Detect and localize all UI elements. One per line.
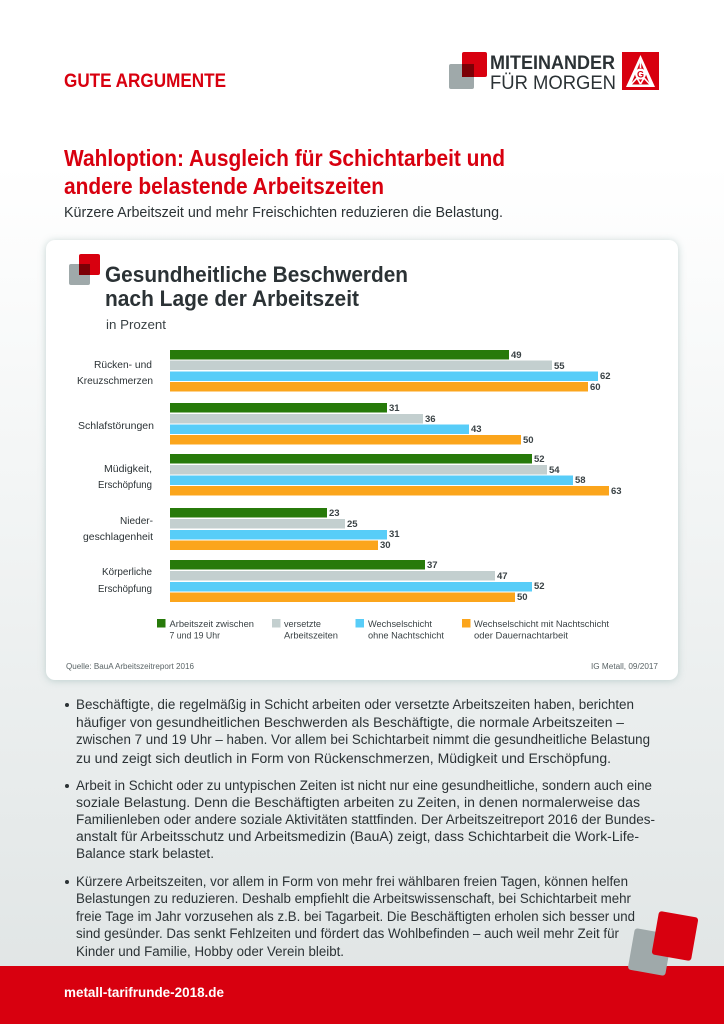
chart unit: in Prozent — [106, 318, 167, 332]
logo: Miteinander für Morgen: G — [637, 70, 644, 80]
text block: bullet 3: Kinder und Familie, Hobby oder Verein bleibt. — [76, 944, 344, 959]
legend: oder Dauernachtarbeit — [474, 630, 568, 642]
group: Müdigkeit, Erschöpfung: 52 — [534, 454, 545, 465]
group: Körperliche Erschöpfung — [98, 560, 545, 603]
group: Schlafstörungen — [78, 403, 534, 446]
icon: tilted squares — [628, 911, 699, 976]
group: Schlafstörungen: 36 — [425, 414, 436, 425]
group: Körperliche Erschöpfung: 47 — [497, 571, 508, 582]
text block: bullet 2: Arbeit in Schicht oder zu untypischen Zeiten ist nicht nur eine gesundheitliche, sondern auch eine — [76, 778, 652, 793]
text block: bullet 3: freie Tage im Jahr vorzusehen als z.B. bei Tagarbeit. Die Beschäftigten erholen sich besser und — [76, 909, 635, 924]
group: Schlafstörungen: 50 — [523, 435, 534, 446]
text block: bullet 1: zu und zeigt sich deutlich in Form von Rückenschmerzen, Müdigkeit und Erschöpfung. — [76, 751, 611, 766]
text block: bullet 1: häufiger von gesundheitlichen Beschwerden als Beschäftigte, die normale Arbeitszeiten – — [76, 715, 624, 730]
group: Körperliche Erschöpfung: Körperliche — [102, 566, 152, 578]
group: Körperliche Erschöpfung: 50 — [517, 592, 528, 603]
group: Niedergeschlagenheit: 30 — [380, 540, 391, 551]
text block: bullet 3: Kürzere Arbeitszeiten, vor allem in Form von mehr frei wählbaren freien Tagen, können helfen — [76, 874, 628, 889]
legend: Arbeitszeit zwischen — [170, 619, 254, 630]
heading — [64, 145, 505, 199]
legend: versetzte — [284, 619, 321, 630]
footer bar: metall-tarifrunde-2018.de — [64, 984, 224, 1000]
group: Niedergeschlagenheit: 31 — [389, 529, 400, 540]
icon: chart squares — [69, 254, 100, 285]
group: Rücken- und Kreuzschmerzen: Kreuzschmerzen — [77, 375, 153, 387]
heading: Wahloption: Ausgleich für Schichtarbeit und — [64, 145, 505, 171]
subheading: Kürzere Arbeitszeit und mehr Freischichten reduzieren die Belastung. — [64, 204, 503, 221]
section label: Gute Argumente: GUTE ARGUMENTE — [64, 71, 226, 92]
chart title: Gesundheitliche Beschwerden — [105, 262, 408, 287]
logo: Miteinander für Morgen: FÜR MORGEN — [490, 73, 616, 94]
group: Rücken- und Kreuzschmerzen — [77, 350, 611, 393]
group: Rücken- und Kreuzschmerzen: 62 — [600, 371, 611, 382]
legend: ohne Nachtschicht — [368, 630, 444, 642]
group: Müdigkeit, Erschöpfung: 63 — [611, 486, 622, 497]
group: Niedergeschlagenheit: 25 — [347, 519, 358, 530]
chart title — [105, 262, 408, 311]
text block: bullet 1 — [65, 697, 650, 766]
legend: Wechselschicht mit Nachtschicht — [474, 619, 609, 630]
group: Körperliche Erschöpfung: 37 — [427, 560, 438, 571]
legend: Wechselschicht — [368, 619, 432, 630]
group: Rücken- und Kreuzschmerzen: 49 — [511, 350, 522, 361]
text block: bullet 2: Familienleben oder andere soziale Aktivitäten stattfinden. Der Arbeitszeitreport 2016 der Bundes- — [76, 812, 655, 827]
group: Rücken- und Kreuzschmerzen: Rücken- und — [94, 359, 152, 371]
text block: bullet 3: Belastungen zu reduzieren. Deshalb empfiehlt die Arbeitswissenschaft, bei Schichtarbeit mehr — [76, 891, 631, 906]
group: Rücken- und Kreuzschmerzen: 60 — [590, 382, 601, 393]
group: Schlafstörungen: 43 — [471, 424, 482, 435]
group: Müdigkeit, Erschöpfung — [98, 454, 622, 497]
group: Schlafstörungen: Schlafstörungen — [78, 420, 154, 432]
chart title: nach Lage der Arbeitszeit — [105, 286, 359, 311]
group: Niedergeschlagenheit: geschlagenheit — [83, 531, 153, 543]
text block: bullet 2: soziale Belastung. Denn die Beschäftigten arbeiten zu Zeiten, in denen normalerweise das — [76, 795, 640, 810]
legend — [157, 619, 609, 642]
legend: 7 und 19 Uhr — [170, 630, 220, 642]
group: Körperliche Erschöpfung: 52 — [534, 581, 545, 592]
group: Schlafstörungen: 31 — [389, 403, 400, 414]
credit note: IG Metall, 09/2017 — [591, 662, 659, 671]
text block: bullet 1: zwischen 7 und 19 Uhr – haben. Vor allem bei Schichtarbeit nimmt die gesundheitliche Belastung — [76, 732, 650, 747]
group: Müdigkeit, Erschöpfung: Müdigkeit, — [104, 463, 152, 475]
logo: Miteinander für Morgen: MITEINANDER — [490, 53, 615, 74]
legend: Arbeitszeiten — [284, 630, 338, 642]
group: Niedergeschlagenheit: Nieder- — [120, 515, 153, 527]
group: Rücken- und Kreuzschmerzen: 55 — [554, 361, 565, 372]
group: Müdigkeit, Erschöpfung: 54 — [549, 465, 560, 476]
source note: Quelle: BauA Arbeitszeitreport 2016 — [66, 662, 195, 671]
footer bar — [0, 966, 724, 1024]
bar chart — [77, 350, 622, 603]
group: Müdigkeit, Erschöpfung: 58 — [575, 475, 586, 486]
text block: bullet 2: Balance stark belastet. — [76, 846, 214, 861]
group: Niedergeschlagenheit — [83, 508, 400, 551]
text block: bullet 2 — [65, 778, 655, 861]
group: Körperliche Erschöpfung: Erschöpfung — [98, 583, 152, 595]
logo: Miteinander für Morgen — [449, 52, 659, 94]
text block: bullet 2: anstalt für Arbeitsschutz und Arbeitsmedizin (BauA) zeigt, dass Schichtarbeit die Work-Life- — [76, 829, 639, 844]
text block: bullet 3: sind gesünder. Das senkt Fehlzeiten und fördert das Wohlbefinden – auch weil mehr Zeit für — [76, 926, 619, 941]
text block: bullet 1: Beschäftigte, die regelmäßig in Schicht arbeiten oder versetzte Arbeitszeiten haben, berichten — [76, 697, 634, 712]
group: Niedergeschlagenheit: 23 — [329, 508, 340, 519]
text block: bullet 3 — [65, 874, 635, 959]
panel: chart card — [46, 240, 678, 681]
group: Müdigkeit, Erschöpfung: Erschöpfung — [98, 479, 152, 491]
heading: andere belastende Arbeitszeiten — [64, 173, 384, 199]
